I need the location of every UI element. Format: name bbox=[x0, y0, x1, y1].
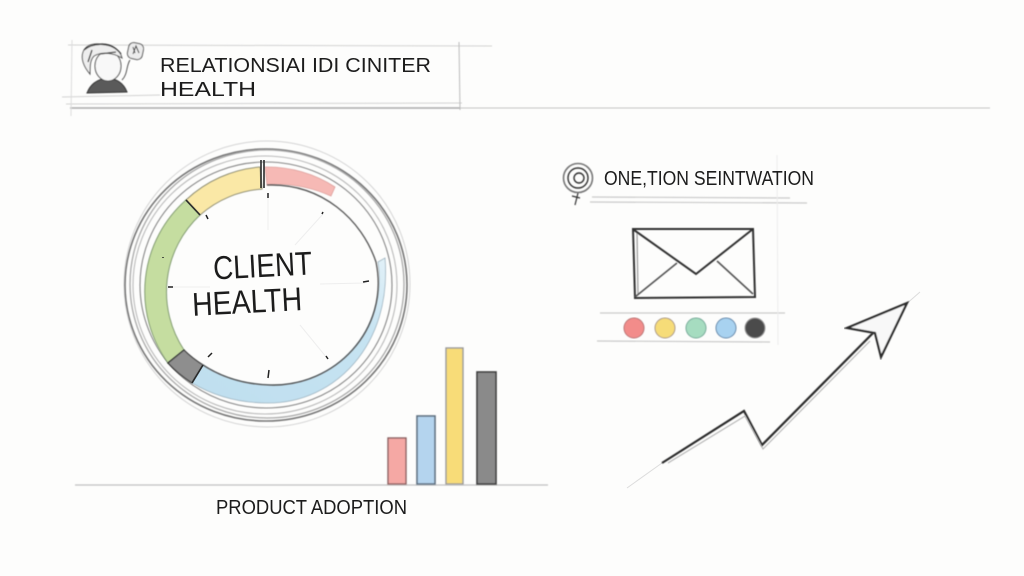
header: relationship client health bbox=[82, 42, 431, 101]
gauge centre label: HEALTH bbox=[191, 280, 303, 323]
icon: person with speech bubble bbox=[82, 42, 144, 93]
bar: blue bbox=[417, 416, 435, 484]
sketched outer rings bbox=[124, 141, 410, 427]
bar: yellow bbox=[446, 348, 463, 484]
ring segment: pink bbox=[265, 167, 335, 196]
inner circle line bbox=[203, 185, 378, 385]
heading: header title: RELATIONSIAI IDI CINITER bbox=[160, 55, 431, 77]
bar: pink bbox=[388, 438, 406, 484]
ring segment: green bbox=[145, 200, 200, 363]
icon: target pin bbox=[564, 164, 592, 205]
panel: one-time sentiment bbox=[564, 164, 814, 338]
bar chart: product adoption bbox=[388, 348, 496, 484]
ring segment: dark grey bbox=[168, 350, 203, 383]
arrow: rising trend bbox=[627, 292, 920, 488]
heading: header title bbox=[160, 55, 431, 101]
ring segment: yellow bbox=[186, 167, 262, 215]
icon: envelope bbox=[633, 229, 755, 298]
label: product adoption: PRODUCT ADOPTION bbox=[216, 497, 407, 519]
colour swatches bbox=[624, 318, 765, 338]
gauge tick marks bbox=[163, 193, 369, 378]
bar: dark grey bbox=[477, 372, 496, 484]
gauge centre label bbox=[191, 244, 313, 323]
segment dividers bbox=[186, 160, 264, 383]
ring segment: blue bbox=[192, 258, 386, 403]
heading: sentiment title: ONE,TION SEINTWATION bbox=[604, 168, 814, 190]
chart: client health donut gauge bbox=[124, 141, 410, 427]
heading: header title: HEALTH bbox=[160, 79, 256, 101]
faint inner guide lines bbox=[170, 195, 365, 358]
gauge centre label: CLIENT bbox=[212, 244, 313, 287]
